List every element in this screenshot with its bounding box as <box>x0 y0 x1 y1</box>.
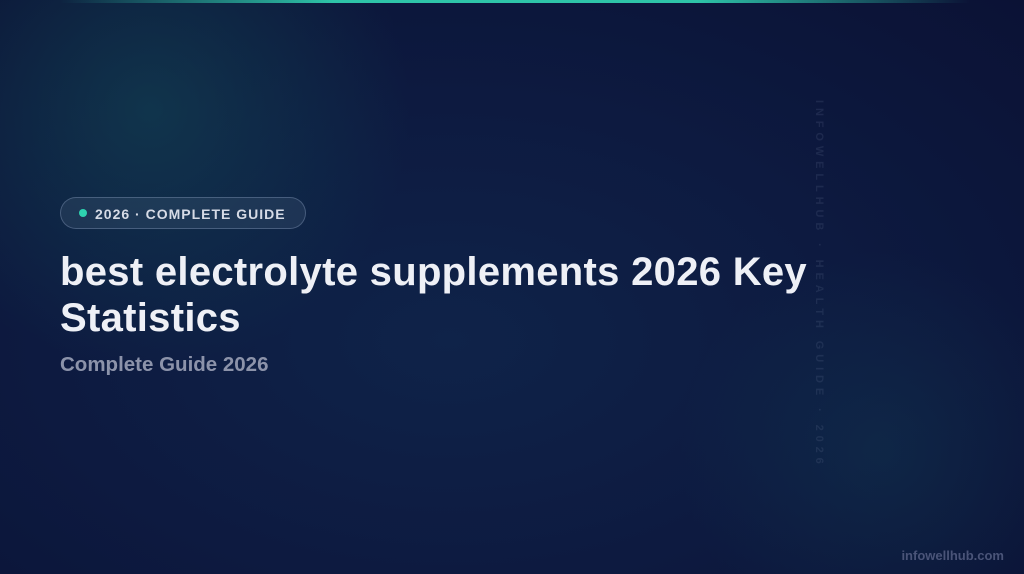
subtitle: Complete Guide 2026 <box>60 353 268 376</box>
footer url: infowellhub.com <box>901 548 1004 563</box>
badge <box>60 197 306 229</box>
vertical watermark: INFOWELLHUB · HEALTH GUIDE · 2026 <box>813 100 825 469</box>
badge text: 2026 · COMPLETE GUIDE <box>95 206 286 222</box>
title: best electrolyte supplements 2026 Key Statistics <box>60 250 807 340</box>
badge dot <box>79 209 87 217</box>
top accent line <box>60 0 970 3</box>
